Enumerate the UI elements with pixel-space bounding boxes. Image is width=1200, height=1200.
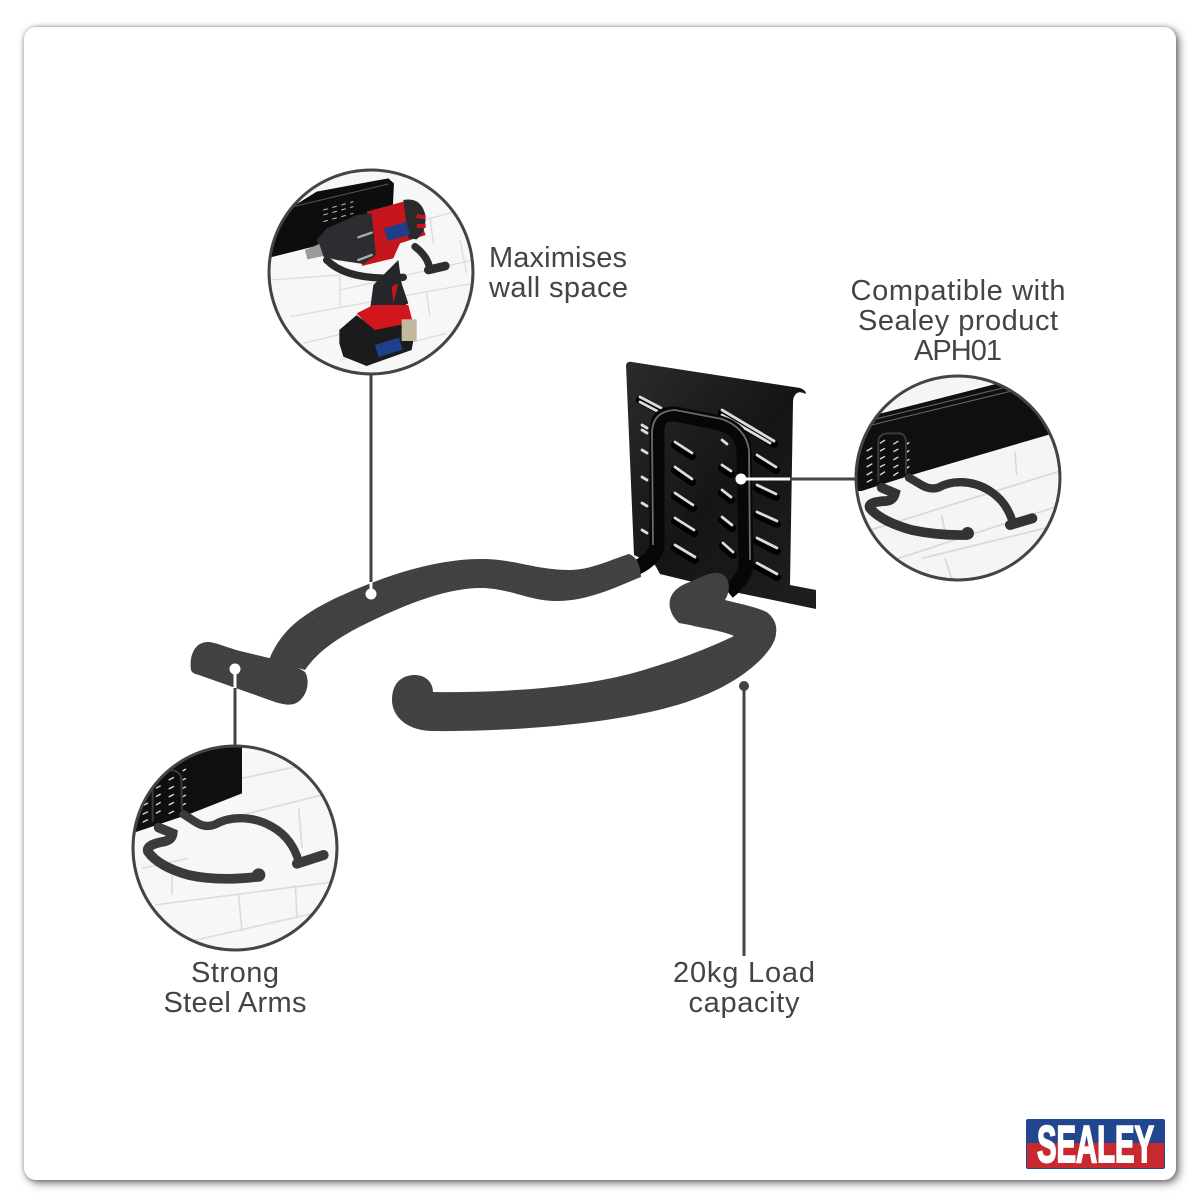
wall [122, 735, 349, 962]
lower foam arm [392, 573, 776, 731]
drill head [317, 213, 376, 264]
drill grip [370, 260, 408, 306]
upper foam arm [269, 554, 641, 670]
label: load capacity [673, 957, 815, 1019]
plate slots [640, 397, 777, 574]
label: load capacity: capacity [688, 987, 800, 1019]
label: strong steel arms: Steel Arms [164, 987, 306, 1019]
label: maximises wall space: Maximises [489, 242, 627, 274]
drill body [362, 202, 426, 266]
callout: load capacity connector [739, 681, 749, 956]
drill hook under tool [327, 260, 403, 278]
callout: strong steel arms connector [230, 664, 240, 747]
rail [132, 743, 242, 833]
label: strong steel arms: Strong [191, 957, 279, 989]
label: compatible with APH01: Compatible with [850, 275, 1066, 307]
wall [260, 160, 487, 387]
inset: hook on rail [854, 374, 1062, 582]
callout: compatible connector [736, 474, 858, 484]
inset: hook arms close view [132, 744, 338, 952]
battery [356, 305, 412, 330]
label: maximises wall space [488, 242, 628, 304]
pegboard [143, 769, 186, 822]
plate slot shadows [640, 400, 777, 577]
hook arms [909, 478, 1013, 522]
label: maximises wall space: wall space [488, 272, 628, 304]
back plate [626, 362, 816, 609]
wire loop [636, 414, 746, 592]
hook [415, 247, 430, 270]
T handle [191, 642, 308, 705]
label: compatible with APH01: Sealey product [858, 305, 1058, 337]
pegboard [867, 440, 909, 482]
label: compatible with APH01 [850, 275, 1066, 367]
inset: drill on hook [268, 168, 474, 376]
label: load capacity: 20kg Load [673, 957, 815, 989]
rail [267, 178, 394, 258]
rail [855, 382, 1053, 491]
hook arms [184, 814, 299, 862]
foam arms [191, 554, 776, 731]
callout: maximises wall space connector [366, 374, 376, 600]
product: wall hook bracket [191, 362, 816, 731]
label: strong steel arms [164, 957, 306, 1019]
label: compatible with APH01: APH01 [914, 335, 1002, 367]
wall [858, 378, 1058, 578]
